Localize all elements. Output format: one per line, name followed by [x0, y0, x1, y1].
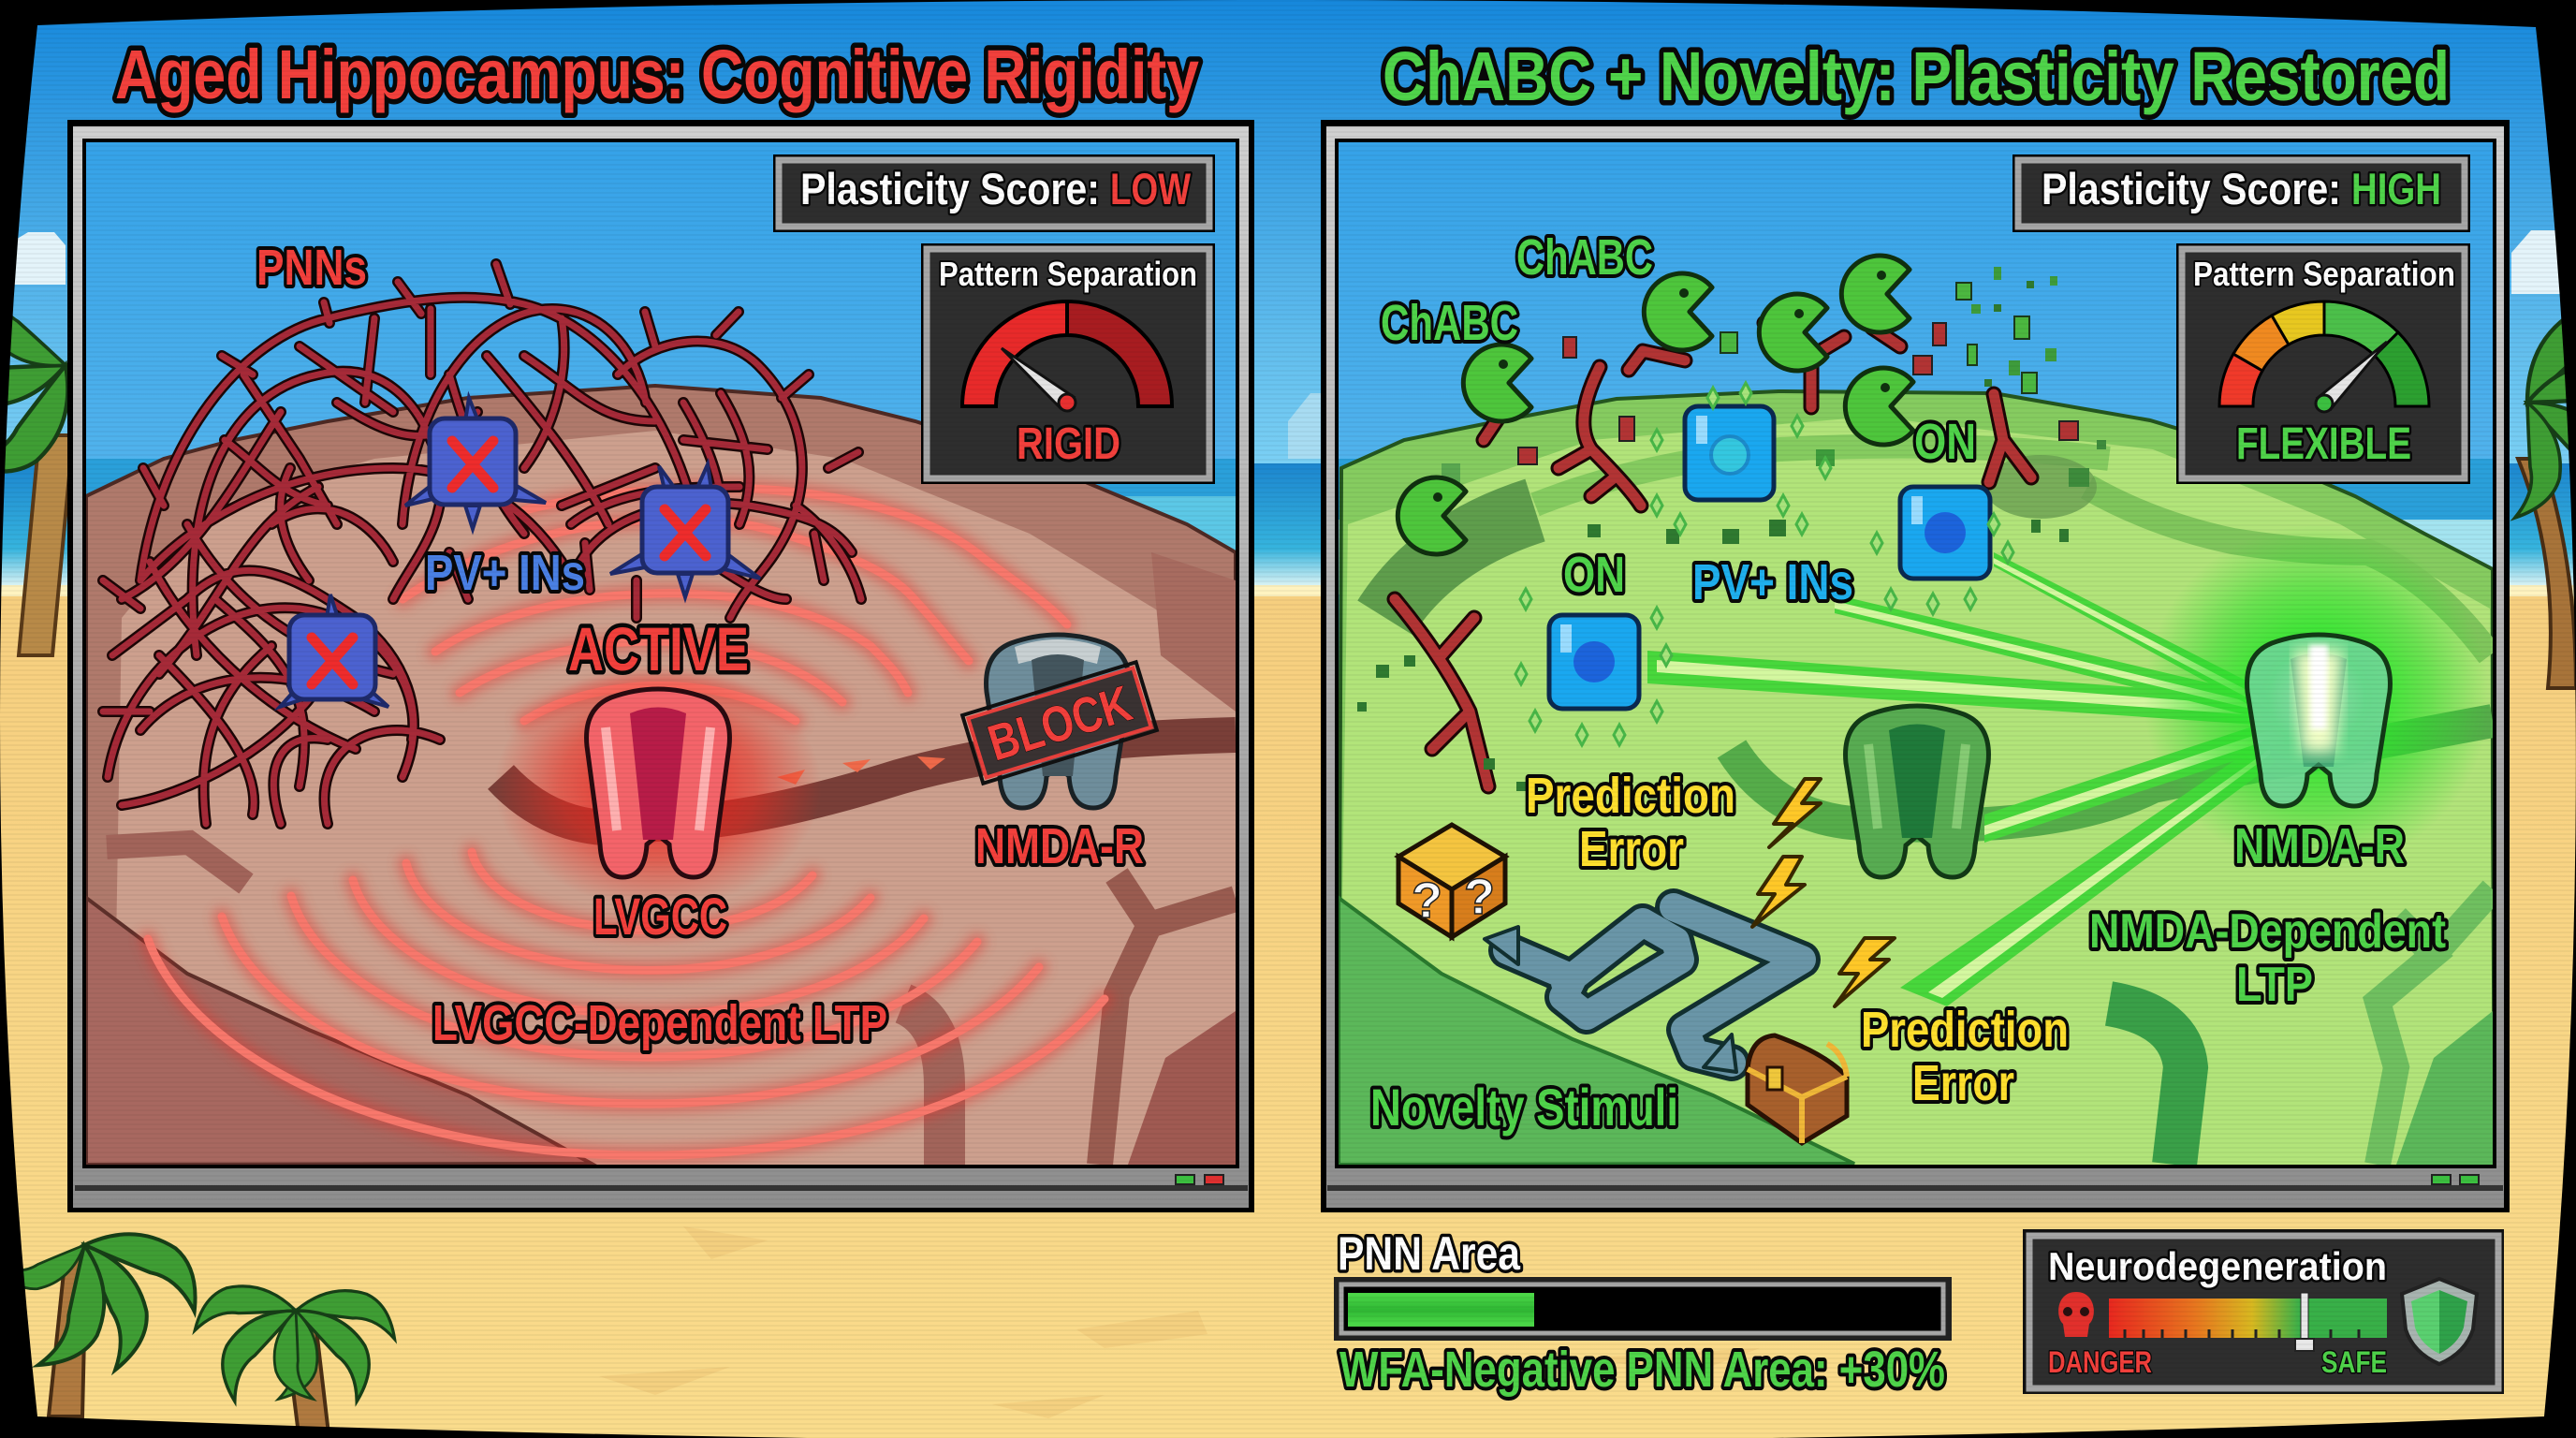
chewed thorn stubs: [1395, 323, 2031, 786]
lightning bolts: [1752, 779, 1895, 1006]
panel: aged hippocampus: [67, 120, 1254, 1212]
gauge: pattern separation flexible: FLEXIBLE: [2236, 419, 2411, 469]
icon: skull: [2058, 1292, 2094, 1337]
label: novelty stimuli: Novelty Stimuli: [1370, 1078, 1678, 1137]
label: NMDA-dependent LTP: NMDA-Dependent: [2089, 904, 2446, 959]
gauge: pattern separation flexible: [2176, 243, 2470, 484]
ripples: LTP waves: [148, 488, 1105, 1155]
icon: shield: [2402, 1279, 2477, 1364]
plasticity score left: LOW: [1110, 164, 1191, 213]
plasticity score right: Plasticity Score:: [2042, 164, 2341, 213]
label: PNNs: PNNs: [256, 240, 367, 296]
label: PV+ INs left: PV+ INs: [425, 545, 585, 601]
PV+ interneuron silenced 2: [610, 464, 760, 597]
monitor frame left: [67, 120, 1254, 1212]
label: prediction error 2: Prediction: [1861, 1002, 2069, 1058]
thorn web: PNNs: [103, 264, 861, 824]
progress bar: [1334, 1277, 1952, 1341]
label: ChABC top: ChABC: [1516, 229, 1653, 286]
plasticity score left: [773, 154, 1215, 232]
label: ChABC left: ChABC: [1381, 295, 1518, 351]
PNN area meter: [1334, 1227, 1952, 1398]
PV+ interneuron silenced 3: [280, 594, 388, 707]
label: prediction error 2: Error: [1912, 1055, 2014, 1111]
monitor frame right: [1321, 120, 2510, 1212]
label: PV+ INs right: PV+ INs: [1692, 554, 1853, 610]
panel: ChABC plus novelty: [1321, 120, 2510, 1212]
label: prediction error 1: Error: [1579, 821, 1684, 877]
label: NMDA-R right: NMDA-R: [2234, 818, 2405, 874]
label: NMDA-R left: NMDA-R: [975, 818, 1144, 874]
brain scene right: [1339, 142, 2493, 1165]
label: DANGER: DANGER: [2048, 1345, 2152, 1379]
channel: NMDA-R glowing: [2247, 635, 2390, 806]
plasticity score right: HIGH: [2351, 164, 2441, 213]
gauge: pattern separation rigid: RIGID: [1017, 419, 1120, 469]
gauge: pattern separation flexible: Pattern Separation: [2193, 255, 2455, 293]
palm tree: upper left: [0, 275, 89, 655]
label: prediction error 2: [1861, 1002, 2069, 1111]
PV+ interneuron active low: [1549, 615, 1639, 709]
novelty track arrow: [1485, 907, 1802, 1072]
label: NMDA-dependent LTP: [2089, 904, 2446, 1012]
palm tree: lower left small: [195, 1282, 395, 1438]
label: LVGCC: LVGCC: [593, 887, 727, 946]
neurodegeneration meter: [2023, 1229, 2504, 1394]
channel: dark green inactive: [1846, 706, 1988, 877]
gauge: pattern separation rigid: Pattern Separation: [939, 255, 1197, 293]
ChABC pacman enzymes: [1398, 256, 1913, 554]
energy beams: [1647, 552, 2275, 1006]
label: prediction error 1: Prediction: [1526, 768, 1735, 824]
palm tree: lower left large: [0, 1221, 210, 1416]
plasticity score left: Plasticity Score:: [800, 164, 1100, 213]
label: NMDA-dependent LTP: LTP: [2236, 958, 2313, 1012]
PV+ interneuron active mid: [1900, 487, 1990, 579]
channel: NMDA-R blocked: [987, 635, 1129, 808]
PV+ interneuron active top: [1685, 406, 1774, 500]
title: left: Aged Hippocampus: Cognitive Rigidity: [115, 36, 1199, 113]
channel: LVGCC active: [587, 689, 729, 877]
activity sparks around neurons: [1515, 383, 2013, 745]
gauge: pattern separation rigid: [921, 243, 1215, 484]
label: LVGCC-Dependent LTP: LVGCC-Dependent LTP: [432, 995, 887, 1051]
glow around LVGCC: [503, 671, 813, 902]
question block: ?: [1464, 869, 1495, 925]
question block: ?: [1412, 873, 1442, 929]
value: WFA-negative PNN area: WFA-Negative PNN Area: +30%: [1339, 1342, 1945, 1398]
plasticity score right: [2012, 154, 2470, 232]
treasure chest: [1748, 1035, 1847, 1143]
label: PNN Area: PNN Area: [1338, 1227, 1521, 1280]
question block: [1398, 825, 1505, 937]
BLOCK sign: BLOCK: [982, 675, 1138, 771]
label: Neurodegeneration: Neurodegeneration: [2048, 1244, 2387, 1288]
label: prediction error 1: [1526, 768, 1735, 877]
label: ACTIVE: ACTIVE: [568, 614, 749, 683]
glow around NMDA-R: [2144, 524, 2490, 871]
label: ON lower: ON: [1563, 547, 1625, 603]
debris particles: [1357, 267, 2106, 791]
label: SAFE: SAFE: [2321, 1345, 2387, 1379]
label: ON upper: ON: [1914, 414, 1976, 470]
palm tree: right: [2496, 281, 2576, 688]
danger to safe bar: [2109, 1293, 2387, 1351]
brain scene left: [86, 142, 1236, 1165]
PV+ interneuron silenced 1: [405, 398, 546, 529]
